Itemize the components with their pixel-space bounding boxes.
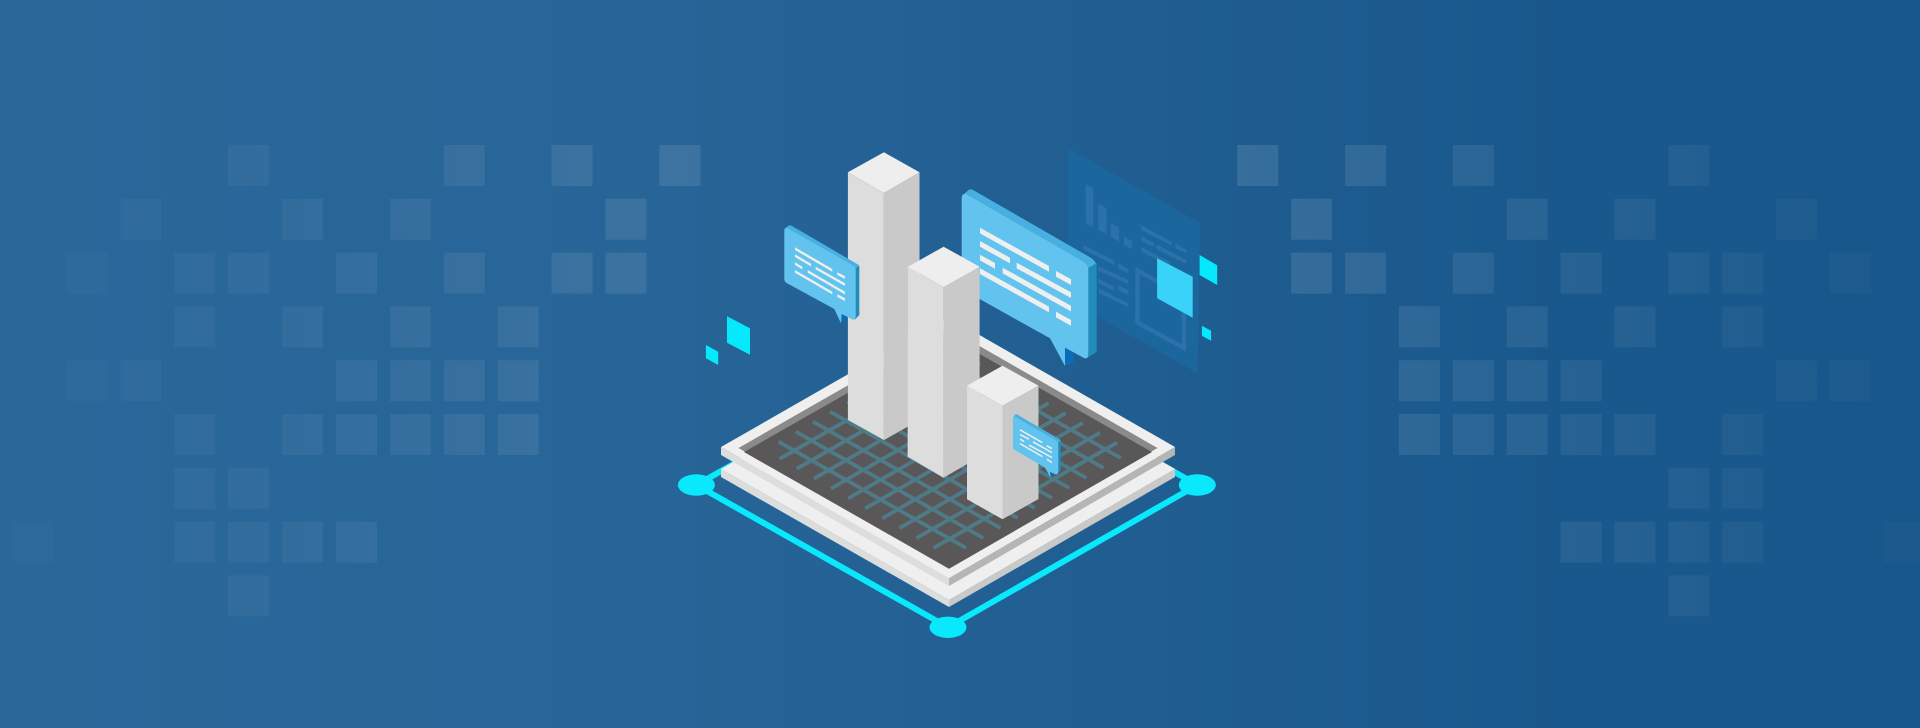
accent: light cyan floating square: [1157, 258, 1193, 318]
speech bubble: left: [784, 225, 859, 323]
accent: bright cyan small square left: [706, 345, 718, 365]
speech bubble: small: [1013, 414, 1061, 478]
platform: upper slab: [721, 317, 1175, 586]
accent: bright cyan small square right: [1202, 326, 1211, 341]
cyan outline with corner nodes: [678, 343, 1216, 638]
speech bubble: large: [962, 189, 1097, 366]
accent: bright cyan square upper right: [1200, 255, 1217, 285]
tower: tall: [848, 152, 920, 440]
platform: lower slab: [721, 339, 1175, 607]
accent: bright cyan square left: [727, 316, 750, 355]
platform grid lines: [779, 352, 1121, 548]
panel: faint background dashboard: [1068, 149, 1200, 373]
tower: middle: [908, 247, 980, 478]
pattern: right fading squares: [1237, 145, 1920, 616]
tower: short: [967, 366, 1038, 519]
pattern: left fading squares: [13, 145, 700, 616]
